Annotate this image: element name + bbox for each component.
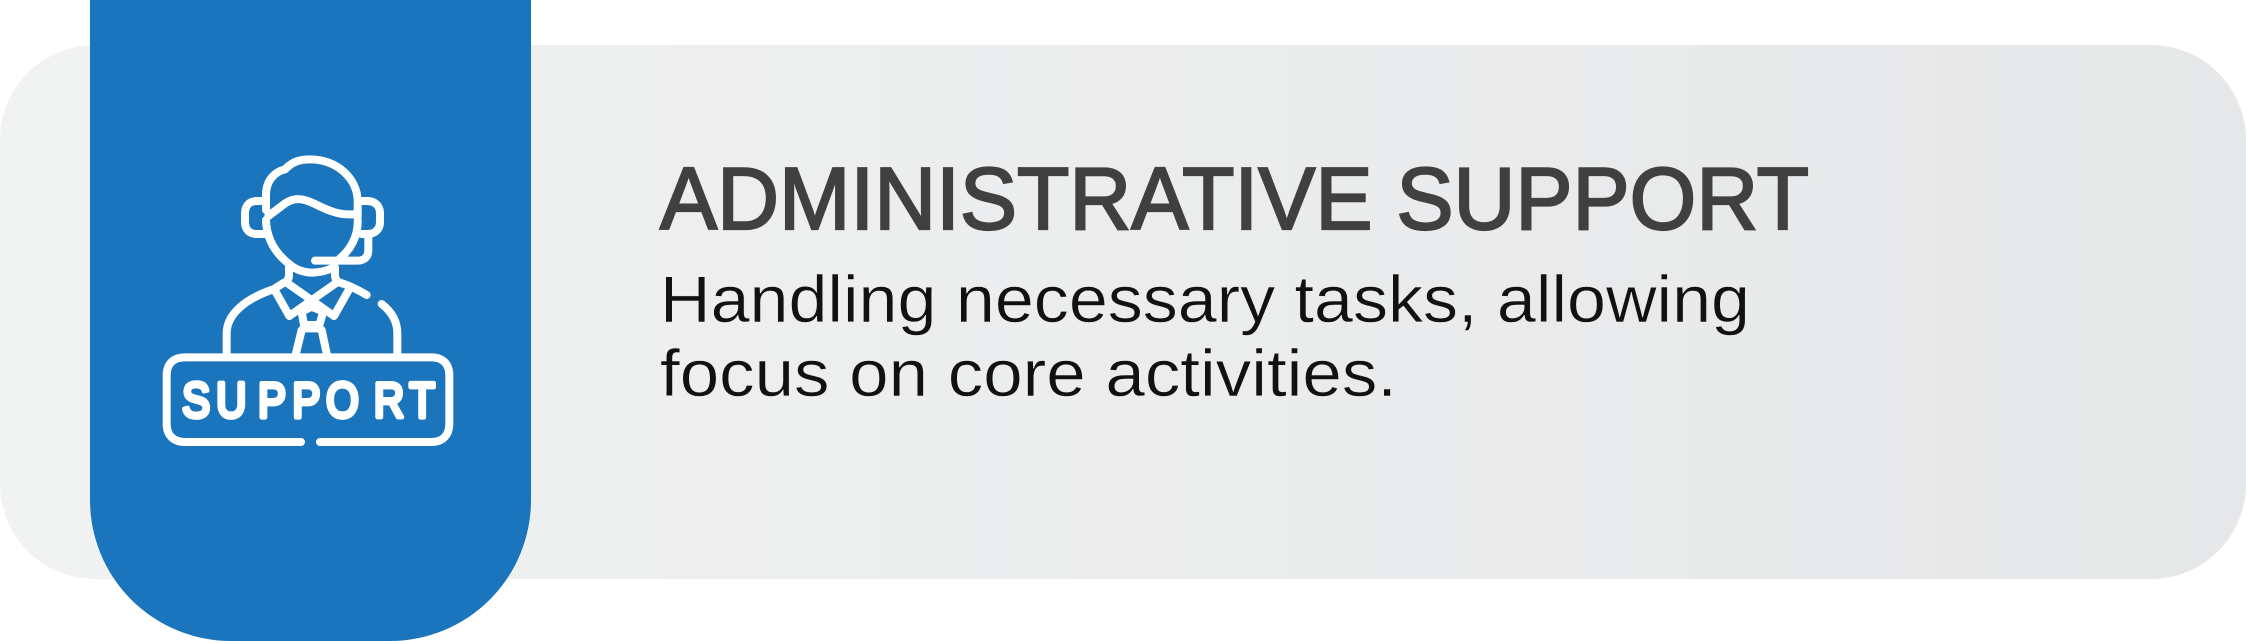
body text line 1: Handling necessary tasks, allowing <box>660 262 1750 336</box>
panel: blue icon tab <box>90 0 531 641</box>
icon part: sign board outline <box>167 357 449 442</box>
icon part: shoulders and neck <box>227 267 397 353</box>
icon part: hair and head outline <box>266 159 358 273</box>
icon part: shirt collar and tie <box>275 283 348 353</box>
heading: ADMINISTRATIVE SUPPORT <box>660 149 1809 248</box>
icon part: headset ear cups and microphone <box>245 201 380 261</box>
body text line 2: focus on core activities. <box>660 336 1397 410</box>
body text <box>660 262 1750 410</box>
icon part: sign lettering: SUPPORT <box>182 373 435 428</box>
icon: support agent with headset behind sign <box>167 159 449 442</box>
